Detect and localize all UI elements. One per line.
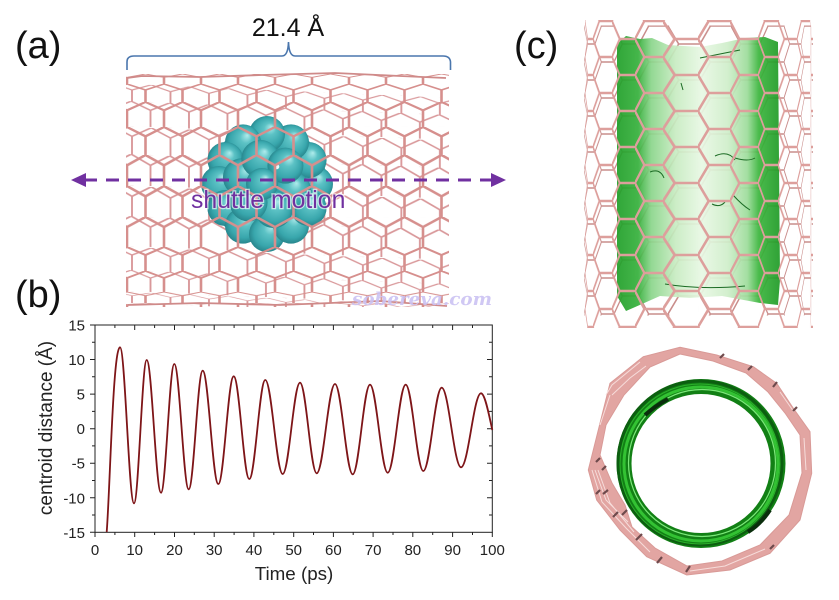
x axis tick labels: 40 (246, 542, 262, 559)
pink outer nanotube ring (588, 347, 812, 575)
line chart: centroid distance vs time (36, 318, 505, 584)
x axis tick labels: 60 (325, 542, 342, 559)
y axis tick labels (63, 318, 85, 542)
x axis tick labels (91, 542, 505, 559)
green isosurface ring (618, 381, 782, 545)
y axis tick labels: 10 (68, 352, 85, 369)
caption: shuttle motion: shuttle motion (191, 187, 345, 214)
y axis tick labels: -15 (63, 525, 85, 542)
label: (a): (a) (15, 25, 61, 67)
x axis tick labels: 80 (404, 542, 421, 559)
nanotube front wall (126, 74, 449, 307)
nanotube back wall (584, 26, 813, 316)
ring lighter inner strands (592, 362, 806, 571)
dimension label: 21.4 Å: 21.4 Å (252, 12, 324, 42)
y axis tick labels: 15 (68, 318, 85, 334)
y axis title: centroid distance (Å) (36, 341, 57, 515)
panel: nanotube with green isosurface side view (584, 20, 813, 328)
nanotube back wall (126, 84, 449, 307)
fullerene base shape (207, 124, 327, 244)
x axis tick labels: 90 (444, 542, 461, 559)
green isosurface cylinder (617, 36, 780, 311)
panel: nanotube with fullerene side view (126, 72, 449, 307)
x axis tick labels: 30 (206, 542, 223, 559)
x axis tick labels: 100 (480, 542, 505, 559)
data curve (107, 347, 492, 532)
y axis tick labels: 5 (77, 387, 85, 404)
x axis tick labels: 50 (285, 542, 302, 559)
y axis tick labels: 0 (77, 421, 85, 438)
fullerene sphere cluster (201, 116, 333, 252)
x axis tick labels: 70 (365, 542, 381, 559)
dark shading arcs (645, 399, 770, 532)
x axis tick labels: 10 (126, 542, 143, 559)
x axis title: Time (ps) (255, 563, 333, 584)
nanotube front wall (585, 20, 813, 328)
watermark: sobereva.com: sobereva.com (351, 289, 492, 310)
label: (c): (c) (514, 25, 558, 67)
y axis tick labels: -10 (63, 490, 85, 507)
blue dimension brace (127, 42, 450, 70)
panel: nanotube end-on view (588, 347, 812, 575)
x axis tick labels: 0 (91, 542, 99, 559)
x axis tick labels: 20 (166, 542, 183, 559)
isosurface dark squiggles (650, 50, 755, 288)
ring dark overlap marks (596, 354, 797, 572)
arrow: shuttle motion double-headed dashed (71, 173, 506, 187)
label: (b): (b) (15, 274, 61, 316)
tube top and bottom edge lines (127, 73, 447, 306)
y axis tick labels: -5 (72, 456, 85, 473)
plot frame and ticks (90, 325, 492, 537)
